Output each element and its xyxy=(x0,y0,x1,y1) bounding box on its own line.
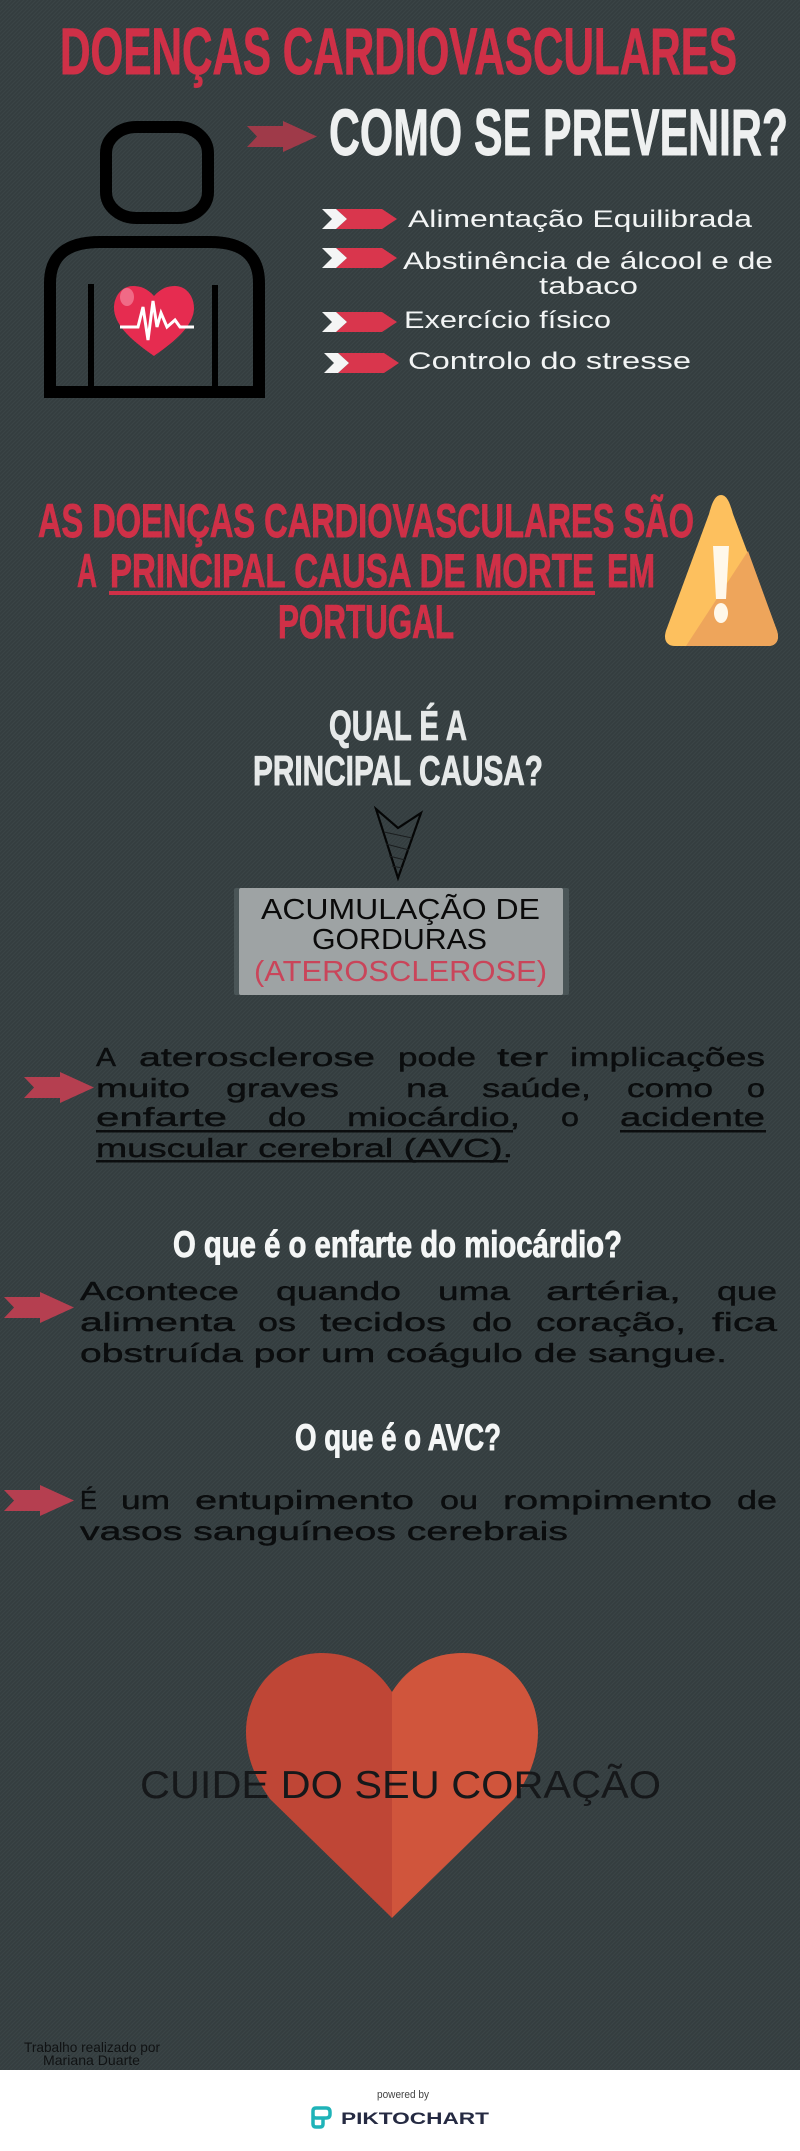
heading: leading cause of death: PRINCIPAL CAUSA DE MORTE xyxy=(110,544,594,597)
text: atherosclerosis implications: aterosclerose xyxy=(139,1042,375,1072)
text: atherosclerosis implications: pode xyxy=(398,1042,476,1072)
text: stroke definition: um xyxy=(121,1485,170,1515)
icon: person outline with heart xyxy=(50,127,259,392)
box: atherosclerosis: ACUMULAÇÃO DE xyxy=(261,892,540,926)
list: prevention measures xyxy=(322,206,773,375)
text: atherosclerosis implications: acidente xyxy=(620,1102,765,1132)
text: atherosclerosis implications: muscular cerebral (AVC). xyxy=(96,1133,513,1163)
arrow: paragraph one xyxy=(24,1072,94,1103)
heading: main cause question: PRINCIPAL CAUSA? xyxy=(253,747,543,794)
arrow: to prevention heading xyxy=(247,121,317,152)
list item 4: Controlo do stresse xyxy=(408,348,691,375)
bullet arrow 3 xyxy=(322,312,397,332)
text: atherosclerosis implications: graves xyxy=(226,1073,339,1103)
credit xyxy=(24,2039,160,2068)
list item 2 xyxy=(403,248,773,300)
icon: heartbeat line xyxy=(120,301,194,340)
text: stroke definition: entupimento xyxy=(195,1485,414,1515)
text: atherosclerosis implications: saúde, xyxy=(482,1073,591,1103)
text: heart attack definition xyxy=(80,1276,778,1368)
text: atherosclerosis implications: muito xyxy=(96,1073,190,1103)
text: take care of your heart: CUIDE DO SEU CORAÇÃO xyxy=(140,1764,661,1807)
heading: main cause question: QUAL É A xyxy=(329,702,467,749)
text: atherosclerosis implications: o xyxy=(747,1073,765,1103)
heading: what is a heart attack: O que é o enfarte do miocárdio? xyxy=(173,1224,622,1265)
text: stroke definition: vasos sanguíneos cerebrais xyxy=(80,1516,568,1546)
arrow: paragraph two xyxy=(4,1292,74,1323)
arrow: paragraph three xyxy=(4,1485,74,1516)
text: atherosclerosis implications xyxy=(96,1042,766,1163)
text: heart attack definition: coração, xyxy=(536,1307,686,1337)
text: heart attack definition: alimenta xyxy=(80,1307,236,1337)
icon: heart xyxy=(114,286,194,356)
box: atherosclerosis: GORDURAS xyxy=(312,924,487,956)
text: heart attack definition: que xyxy=(717,1276,777,1306)
list item 3: Exercício físico xyxy=(404,307,611,334)
text: stroke definition: É xyxy=(80,1485,97,1515)
heading: leading cause of death xyxy=(38,494,694,648)
heading: what is a stroke: O que é o AVC? xyxy=(295,1417,501,1458)
box: atherosclerosis xyxy=(234,888,569,995)
text: atherosclerosis implications: miocárdio, xyxy=(347,1102,520,1132)
wordmark: PIKTOCHART xyxy=(341,2109,490,2128)
list item 2: Abstinência de álcool e de xyxy=(403,248,773,275)
icon: piktochart logo xyxy=(313,2108,330,2127)
bullet arrow 2 xyxy=(322,248,397,268)
heading: leading cause of death: EM xyxy=(607,544,655,597)
text: stroke definition xyxy=(80,1485,777,1546)
text: stroke definition: ou xyxy=(440,1485,478,1515)
text: atherosclerosis implications: como xyxy=(627,1073,713,1103)
text: heart attack definition: os xyxy=(258,1307,296,1337)
credit: Trabalho realizado por xyxy=(24,2039,160,2055)
powered by: powered by xyxy=(377,2089,429,2101)
text: atherosclerosis implications: do xyxy=(268,1102,306,1132)
text: stroke definition: rompimento xyxy=(503,1485,712,1515)
text: stroke definition: de xyxy=(737,1485,777,1515)
text: heart attack definition: fica xyxy=(712,1307,778,1337)
bullet arrow 4 xyxy=(324,353,399,373)
text: atherosclerosis implications: o xyxy=(561,1102,579,1132)
text: atherosclerosis implications: ter xyxy=(497,1042,549,1072)
bullet arrow 1 xyxy=(322,209,397,229)
footer: piktochart xyxy=(0,2070,800,2151)
text: atherosclerosis implications: na xyxy=(406,1073,449,1103)
text: atherosclerosis implications: enfarte xyxy=(96,1102,227,1132)
list item 1: Alimentação Equilibrada xyxy=(408,206,753,233)
text: atherosclerosis implications: A xyxy=(96,1042,117,1072)
icon: warning triangle xyxy=(665,495,778,646)
text: heart attack definition: do xyxy=(472,1307,512,1337)
arrow: hand drawn down xyxy=(376,809,421,878)
text: heart attack definition: uma xyxy=(438,1276,511,1306)
credit: Mariana Duarte xyxy=(43,2052,140,2068)
box: atherosclerosis: (ATEROSCLEROSE) xyxy=(254,956,547,988)
text: heart attack definition: tecidos xyxy=(320,1307,446,1337)
heading: leading cause of death: PORTUGAL xyxy=(278,595,454,648)
text: heart attack definition: quando xyxy=(276,1276,401,1306)
text: heart attack definition: obstruída por um coágulo de sangue. xyxy=(80,1338,727,1368)
text: heart attack definition: artéria, xyxy=(546,1276,681,1306)
list item 2: tabaco xyxy=(539,273,638,300)
heading: leading cause of death: A xyxy=(77,544,97,597)
text: heart attack definition: Acontece xyxy=(80,1276,239,1306)
heading: main cause question xyxy=(253,702,543,794)
text: atherosclerosis implications: implicações xyxy=(570,1042,765,1072)
icon: large heart xyxy=(246,1653,538,1918)
